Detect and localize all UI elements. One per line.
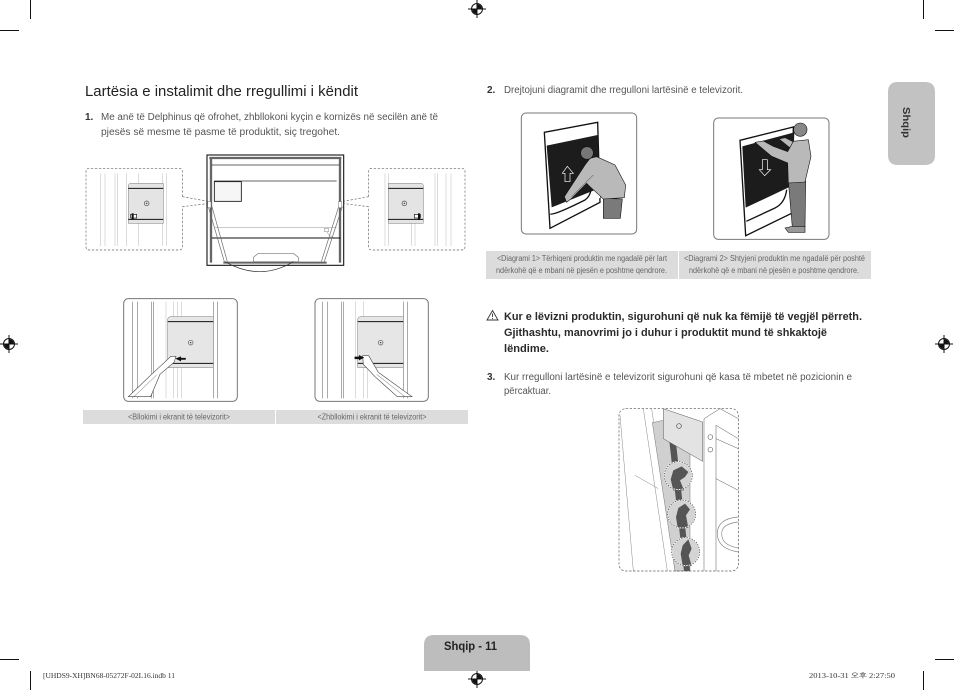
footer tab: page number: [424, 635, 530, 671]
diagram: unlocking the TV screen: [315, 299, 428, 401]
footer: date and time: 2013-10-31 오후 2:27:50: [809, 672, 896, 680]
title: Lartësia e instalimit dhe rregullimi i këndit: [85, 83, 359, 100]
step 2 text: 2.: [487, 85, 496, 96]
registration mark: top: [468, 0, 486, 18]
diagram 2: pushing the product down: [714, 118, 829, 239]
warning text: Kur e lëvizni produktin, sigurohuni që nuk ka fëmijë të vegjël përreth.: [504, 311, 862, 323]
caption: diagram 1: ndërkohë që e mbani në pjesën e poshtme qendrore.: [496, 266, 667, 275]
caption: locking: <Bllokimi i ekranit të televizorit>: [128, 412, 230, 422]
diagram 1: pulling the product up: [521, 113, 637, 234]
footer tab: page number: Shqip - 11: [444, 641, 498, 653]
icon: up arrow: [562, 166, 573, 182]
caption: unlocking: [276, 410, 468, 424]
detail: right latch: [369, 168, 465, 250]
registration mark: left: [0, 335, 18, 353]
side tab: language: [888, 82, 935, 165]
caption: diagram 1: <Diagrami 1> Tërhiqeni produktin me ngadalë për lart: [497, 254, 668, 263]
step 1 text: 1.: [85, 112, 94, 123]
diagram: locking the TV screen: [124, 299, 237, 401]
detail: left latch: [86, 168, 182, 250]
step 3 text: përcaktuar.: [504, 386, 551, 397]
caption: unlocking: <Zhbllokimi i ekranit të televizorit>: [318, 412, 427, 422]
connector lines: [182, 197, 369, 207]
registration mark: right: [935, 335, 953, 353]
warning text: lëndime.: [504, 343, 549, 355]
step 3 text: [487, 372, 852, 397]
caption: diagram 2: ndërkohë që e mbani në pjesën e poshtme qendrore.: [689, 266, 859, 275]
caption: diagram 1: [486, 251, 678, 279]
step 2 text: Drejtojuni diagramit dhe rregulloni lartësinë e televizorit.: [504, 85, 743, 96]
step 1 text: [85, 112, 438, 138]
icon: down arrow: [759, 160, 771, 176]
step 1 text: Me anë të Delphinus që ofrohet, zhbllokoni kyçin e kornizës në secilën anë të: [101, 112, 438, 123]
caption: diagram 2: <Diagrami 2> Shtyjeni produktin me ngadalë për poshtë: [684, 254, 865, 263]
step 1 text: pjesës së mesme të pasme të produktit, siç tregohet.: [101, 127, 340, 138]
step 3 text: Kur rregulloni lartësinë e televizorit sigurohuni që kasa të mbetet në pozicionin e: [504, 372, 852, 383]
caption: locking: [83, 410, 275, 424]
side tab: language: Shqip: [900, 107, 912, 138]
warning text: [504, 311, 862, 355]
step 3 text: 3.: [487, 372, 496, 383]
TV frame: [207, 155, 344, 272]
caption: diagram 2: [679, 251, 871, 279]
person lifting: [564, 147, 626, 218]
registration mark: bottom: [468, 670, 486, 688]
person pushing: [755, 123, 811, 232]
diagram 3: bracket position detail: [619, 409, 738, 571]
icon: warning triangle: [487, 310, 498, 320]
footer: file name: [UHDS9-XH]BN68-05272F-02L16.indb 11: [43, 672, 176, 680]
markers: three hook positions: [664, 462, 700, 566]
diagram: back of TV with two detail views: [86, 155, 465, 272]
warning text: Gjithashtu, manovrimi jo i duhur i produktit mund të shkaktojë: [504, 327, 827, 339]
